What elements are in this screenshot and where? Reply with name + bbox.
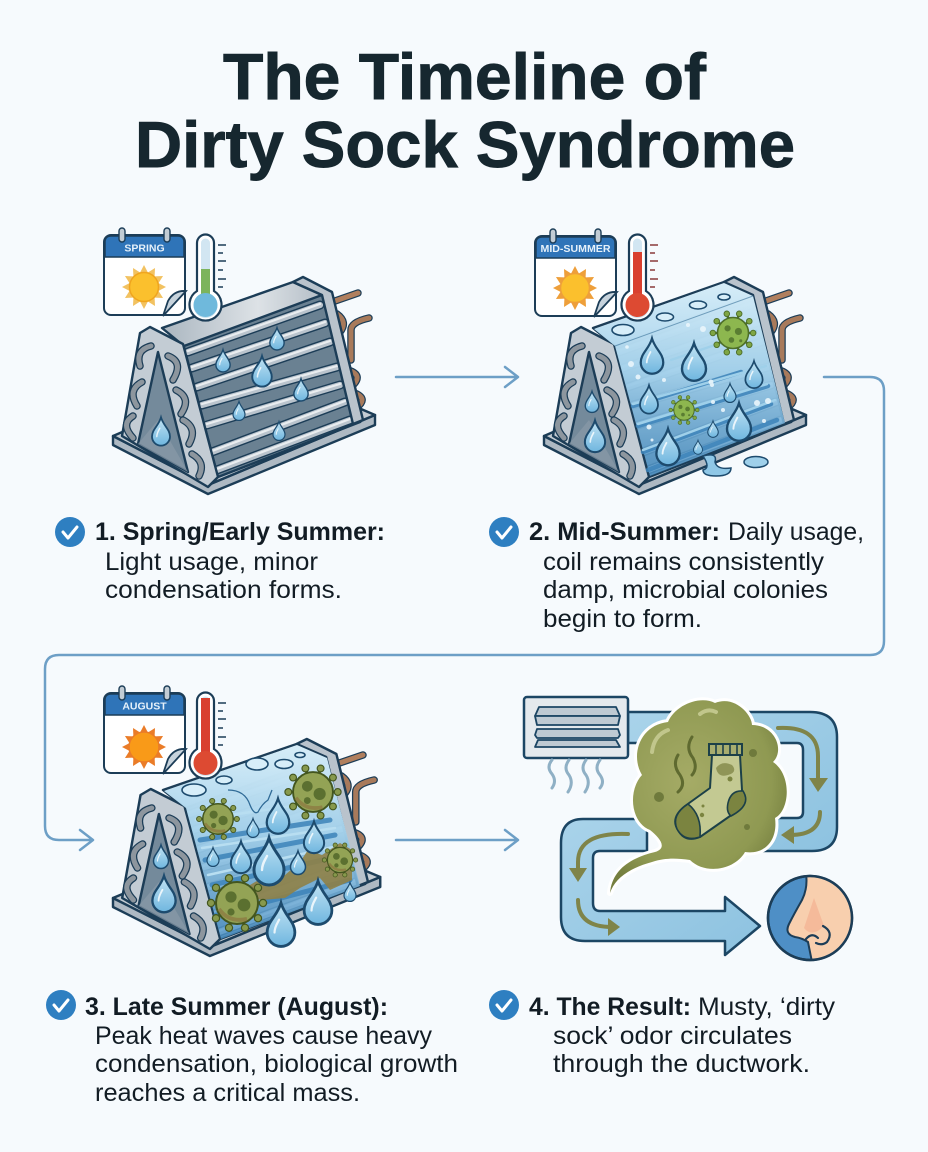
- text block: step 4: through the ductwork.: [553, 1050, 810, 1078]
- icon: check badge 2: [489, 517, 519, 547]
- icon: spring calendar: SPRING: [124, 242, 165, 254]
- smear: brown growth: [250, 843, 352, 900]
- text block: step 2: [489, 517, 864, 633]
- text block: step 4: [489, 990, 836, 1078]
- icon: spring calendar: [104, 228, 186, 316]
- title: [135, 40, 795, 181]
- icon: check badge 4: [489, 990, 519, 1020]
- icon: vented air streams: [549, 760, 602, 792]
- icon: air vent: [524, 697, 628, 792]
- arrow: connector from stage 2 to stage 3: [45, 377, 884, 850]
- text block: step 4: Musty, ‘dirty: [698, 993, 836, 1021]
- text block: step 1: 1. Spring/Early Summer:: [95, 518, 385, 546]
- icon: odor cloud: [610, 700, 787, 893]
- text block: step 1: [55, 517, 385, 604]
- ductwork: lower arrow loop: [561, 819, 760, 955]
- text block: step 3: reaches a critical mass.: [95, 1079, 360, 1107]
- ductwork: upper loop: [628, 712, 837, 851]
- icon: evaporator coil, clean: [113, 277, 375, 494]
- arrow: stage 1 to stage 2: [396, 367, 518, 387]
- icon: check badge 3: [46, 990, 76, 1020]
- arrow: stage 3 to stage 4: [396, 830, 518, 850]
- text block: step 3: Peak heat waves cause heavy: [95, 1022, 432, 1050]
- text block: step 2: begin to form.: [543, 605, 702, 633]
- text block: step 2: coil remains consistently: [543, 548, 825, 576]
- icon: evaporator coil, heavy growth: [113, 739, 380, 956]
- text block: step 4: sock’ odor circulates: [553, 1022, 792, 1050]
- arrows: airflow direction: [569, 728, 828, 936]
- panel: stage 3 illustration: [104, 686, 380, 956]
- text block: step 1: Light usage, minor: [105, 548, 318, 576]
- icon: check badge 1: [55, 517, 85, 547]
- panel: stage 4 illustration: [524, 697, 860, 962]
- panel: stage 1 illustration: [104, 228, 375, 494]
- icon: mid-summer calendar: MID-SUMMER: [540, 244, 611, 255]
- text block: step 1: condensation forms.: [105, 576, 342, 604]
- text block: step 3: 3. Late Summer (August):: [85, 993, 388, 1021]
- text block: step 2: 2. Mid-Summer:: [529, 518, 720, 546]
- icon: thermometer, warm: [622, 234, 658, 321]
- icon: odor wisps: [675, 737, 695, 792]
- text block: step 2: Daily usage,: [728, 518, 864, 546]
- text block: step 3: condensation, biological growth: [95, 1050, 458, 1078]
- icon: thermometer, hot: [190, 692, 226, 779]
- icon: August calendar: AUGUST: [122, 700, 167, 712]
- text block: step 4: 4. The Result:: [529, 993, 691, 1021]
- icon: thermometer, moderate: [190, 234, 226, 321]
- text block: step 2: damp, microbial colonies: [543, 576, 828, 604]
- text block: step 3: [46, 990, 458, 1107]
- title: The Timeline of: [223, 40, 706, 113]
- icon: August calendar: [104, 686, 186, 774]
- icon: mid-summer calendar: [535, 229, 617, 317]
- icon: evaporator coil, damp: [544, 277, 806, 494]
- title: Dirty Sock Syndrome: [135, 108, 795, 181]
- icon: nose: [766, 874, 854, 962]
- icon: dirty sock: [675, 744, 746, 839]
- panel: stage 2 illustration: [535, 229, 806, 494]
